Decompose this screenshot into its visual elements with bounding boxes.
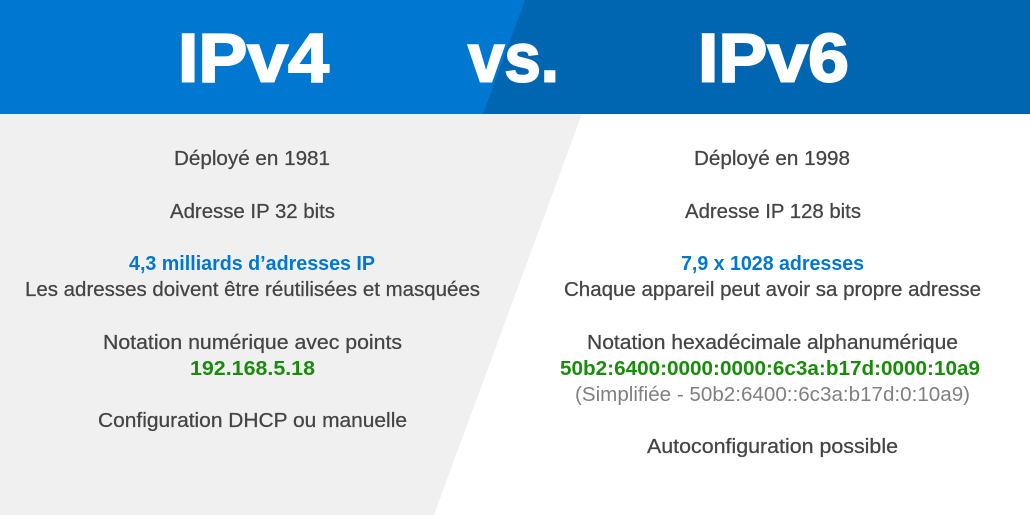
notation: Notation hexadécimale alphanumérique <box>587 332 958 354</box>
own address note: Chaque appareil peut avoir sa propre adresse <box>564 279 981 301</box>
deployment year: Déployé en 1981 <box>174 148 330 170</box>
IPv4 column <box>25 148 480 432</box>
panel: IPv6 background <box>434 114 1030 515</box>
configuration: Configuration DHCP ou manuelle <box>98 410 407 432</box>
header band <box>0 0 1030 114</box>
IPv6 column <box>560 148 981 458</box>
deployment year: Déployé en 1998 <box>694 148 850 170</box>
address size: Adresse IP 128 bits <box>685 201 861 223</box>
example address: 192.168.5.18 <box>190 358 315 380</box>
address count: 4,3 milliards d’adresses IP <box>129 253 375 275</box>
address size: Adresse IP 32 bits <box>170 201 335 223</box>
simplified address: (Simplifiée - 50b2:6400::6c3a:b17d:0:10a9) <box>575 384 970 406</box>
notation: Notation numérique avec points <box>103 332 402 354</box>
configuration: Autoconfiguration possible <box>647 436 898 458</box>
address reuse note: Les adresses doivent être réutilisées et masquées <box>25 279 480 301</box>
title: IPv6: IPv6 <box>698 20 849 96</box>
panel: IPv4 background <box>0 114 582 515</box>
address count: 7,9 x 1028 adresses <box>681 253 864 275</box>
title: IPv4: IPv4 <box>178 20 329 96</box>
title: vs.: vs. <box>468 20 559 96</box>
example address: 50b2:6400:0000:0000:6c3a:b17d:0000:10a9 <box>560 358 980 380</box>
